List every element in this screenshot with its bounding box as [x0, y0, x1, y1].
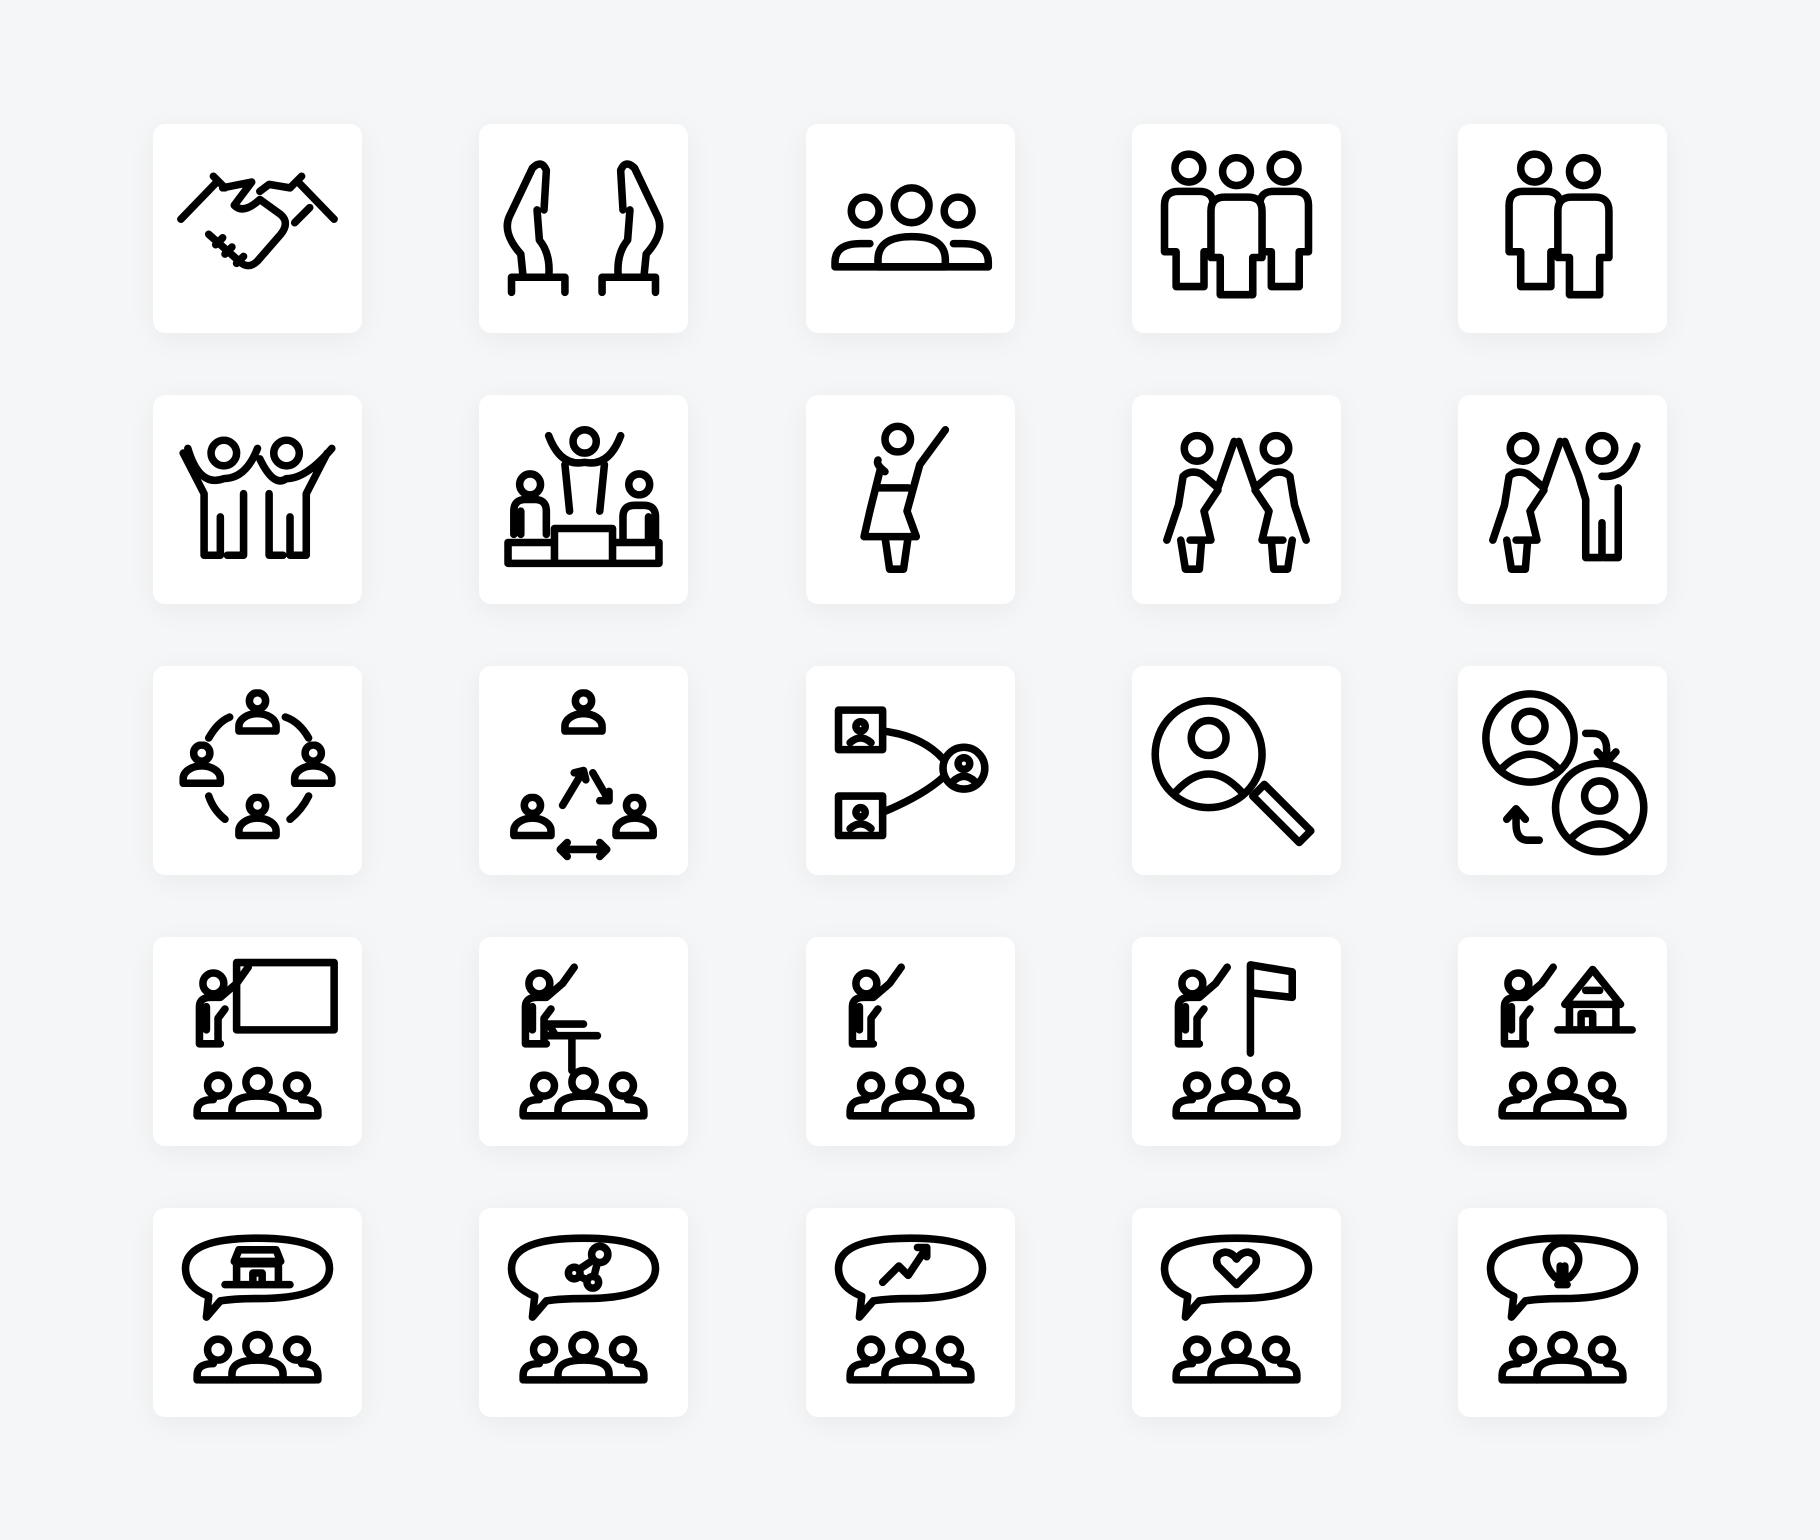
tile: network profiles	[806, 666, 1015, 875]
tile: presenter raising hand	[806, 937, 1015, 1146]
tile: two women high-five	[1132, 395, 1341, 604]
tile: search person	[1132, 666, 1341, 875]
tile: presenter at podium	[479, 937, 688, 1146]
tile: woman waving	[806, 395, 1015, 604]
tile: two standing people	[1458, 124, 1667, 333]
tile: group of three	[806, 124, 1015, 333]
tile: presenter with flag	[1132, 937, 1341, 1146]
tile: two people cheering	[153, 395, 362, 604]
tile: presenter with store	[1458, 937, 1667, 1146]
tile: circle of people	[153, 666, 362, 875]
tile: podium winners	[479, 395, 688, 604]
tile: swap people	[1458, 666, 1667, 875]
tile: presenter with board	[153, 937, 362, 1146]
tile: team triangle	[479, 666, 688, 875]
tile: praying hands	[479, 124, 688, 333]
tile: three standing people	[1132, 124, 1341, 333]
tile: handshake	[153, 124, 362, 333]
tile: woman and man high-five	[1458, 395, 1667, 604]
tile: speech bubble heart	[1132, 1208, 1341, 1417]
tile: speech bubble molecule	[479, 1208, 688, 1417]
tile: speech bubble store	[153, 1208, 362, 1417]
tile: speech bubble growth chart	[806, 1208, 1015, 1417]
tile: speech bubble idea bulb	[1458, 1208, 1667, 1417]
